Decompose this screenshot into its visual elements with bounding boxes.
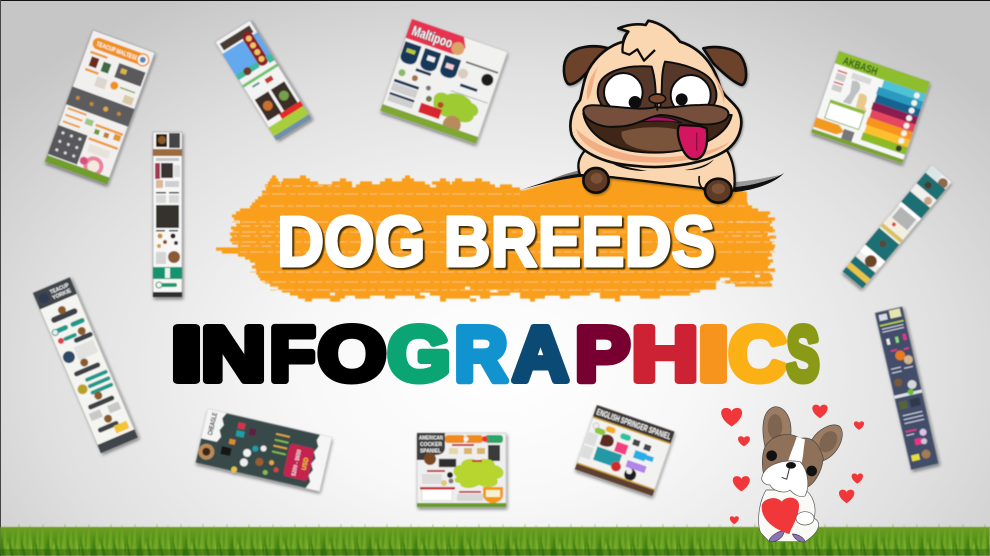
thumbnail: Teacup Yorkie: YORKIE xyxy=(52,288,73,301)
illustration: pug peeking over the banner xyxy=(564,21,746,203)
heading: Infographics: R xyxy=(454,312,508,398)
thumbnail: Cheagle: CHEAGLE xyxy=(207,412,219,436)
pug mouth xyxy=(583,112,732,153)
bulldog feet xyxy=(769,531,784,542)
hearts around the bulldog xyxy=(721,405,864,524)
heading: Infographics: O xyxy=(318,312,386,398)
illustration: French bulldog holding a heart xyxy=(759,407,842,542)
thumbnail: American Cocker Spaniel: COCKER xyxy=(420,442,442,448)
pug tongue xyxy=(678,125,707,159)
heading: Dog Breeds: DOG BREEDS xyxy=(277,203,715,282)
orange brush stroke banner xyxy=(216,176,776,300)
thumbnail: American Cocker Spaniel: AMERICAN xyxy=(419,436,443,442)
thumbnail: Teacup Maltese xyxy=(45,30,155,184)
bulldog eyes and nose xyxy=(766,450,817,479)
pug paws xyxy=(583,168,732,203)
thumbnail: Akbash xyxy=(811,51,930,163)
pug nose xyxy=(649,94,666,103)
heading: Infographics: C xyxy=(728,312,786,398)
thumbnail: American Cocker Spaniel xyxy=(417,433,506,507)
heading: Infographics: A xyxy=(512,312,568,398)
thumbnail: tall white breed sheet xyxy=(153,132,182,297)
pug body xyxy=(578,150,735,191)
pug body creases xyxy=(610,159,714,171)
pug head xyxy=(570,21,741,167)
grass strip xyxy=(0,521,990,556)
bulldog muzzle xyxy=(762,461,808,497)
bulldog body xyxy=(759,490,819,542)
heading: Infographics: F xyxy=(270,312,316,398)
pug moustache muzzle xyxy=(583,105,728,127)
thumbnail: dark navy breed strip xyxy=(875,307,938,470)
heading: Infographics: G xyxy=(388,312,450,398)
thumbnail: dog breed chart with blue header xyxy=(215,20,311,140)
thumbnail: English Springer Spaniel xyxy=(575,405,675,496)
heading: Infographics: H xyxy=(632,312,698,398)
heading: Infographics: I xyxy=(698,312,730,398)
thumbnail: Cheagle xyxy=(195,409,332,492)
hair tuft line xyxy=(622,32,655,61)
thumbnail: Teacup Yorkie xyxy=(33,277,138,453)
bulldog head xyxy=(762,435,823,487)
heading: Infographics: N xyxy=(201,312,266,398)
thumbnail: Akbash: AKBASH xyxy=(841,55,879,78)
thumbnail: Teacup Yorkie: TEACUP xyxy=(49,282,71,296)
pug ears xyxy=(564,46,746,85)
bulldog ears xyxy=(763,407,842,461)
thumbnail: Teacup Maltese: TEACUP MALTESE xyxy=(95,42,139,62)
pug eye patches and eyes xyxy=(598,62,716,115)
thumbnail: American Cocker Spaniel: SPANIEL xyxy=(420,448,442,454)
thumbnail: English Springer Spaniel: ENGLISH SPRINGER SPANIEL xyxy=(595,407,672,441)
thumbnail: teal breed strip xyxy=(843,165,952,288)
bulldog paw xyxy=(796,512,814,525)
thumbnail: Maltipoo: Maltipoo xyxy=(410,22,455,51)
heading: Infographics: I xyxy=(170,312,202,398)
slit swooshes behind the pug xyxy=(518,168,784,192)
big red heart xyxy=(762,498,799,534)
heading: Infographics: P xyxy=(575,312,630,398)
heading: Infographics: S xyxy=(786,312,820,398)
thumbnail: Maltipoo xyxy=(380,19,507,144)
thumbnail: Cheagle: $200 - $650 xyxy=(291,449,303,477)
thumbnail: Cheagle: USD xyxy=(302,457,311,471)
